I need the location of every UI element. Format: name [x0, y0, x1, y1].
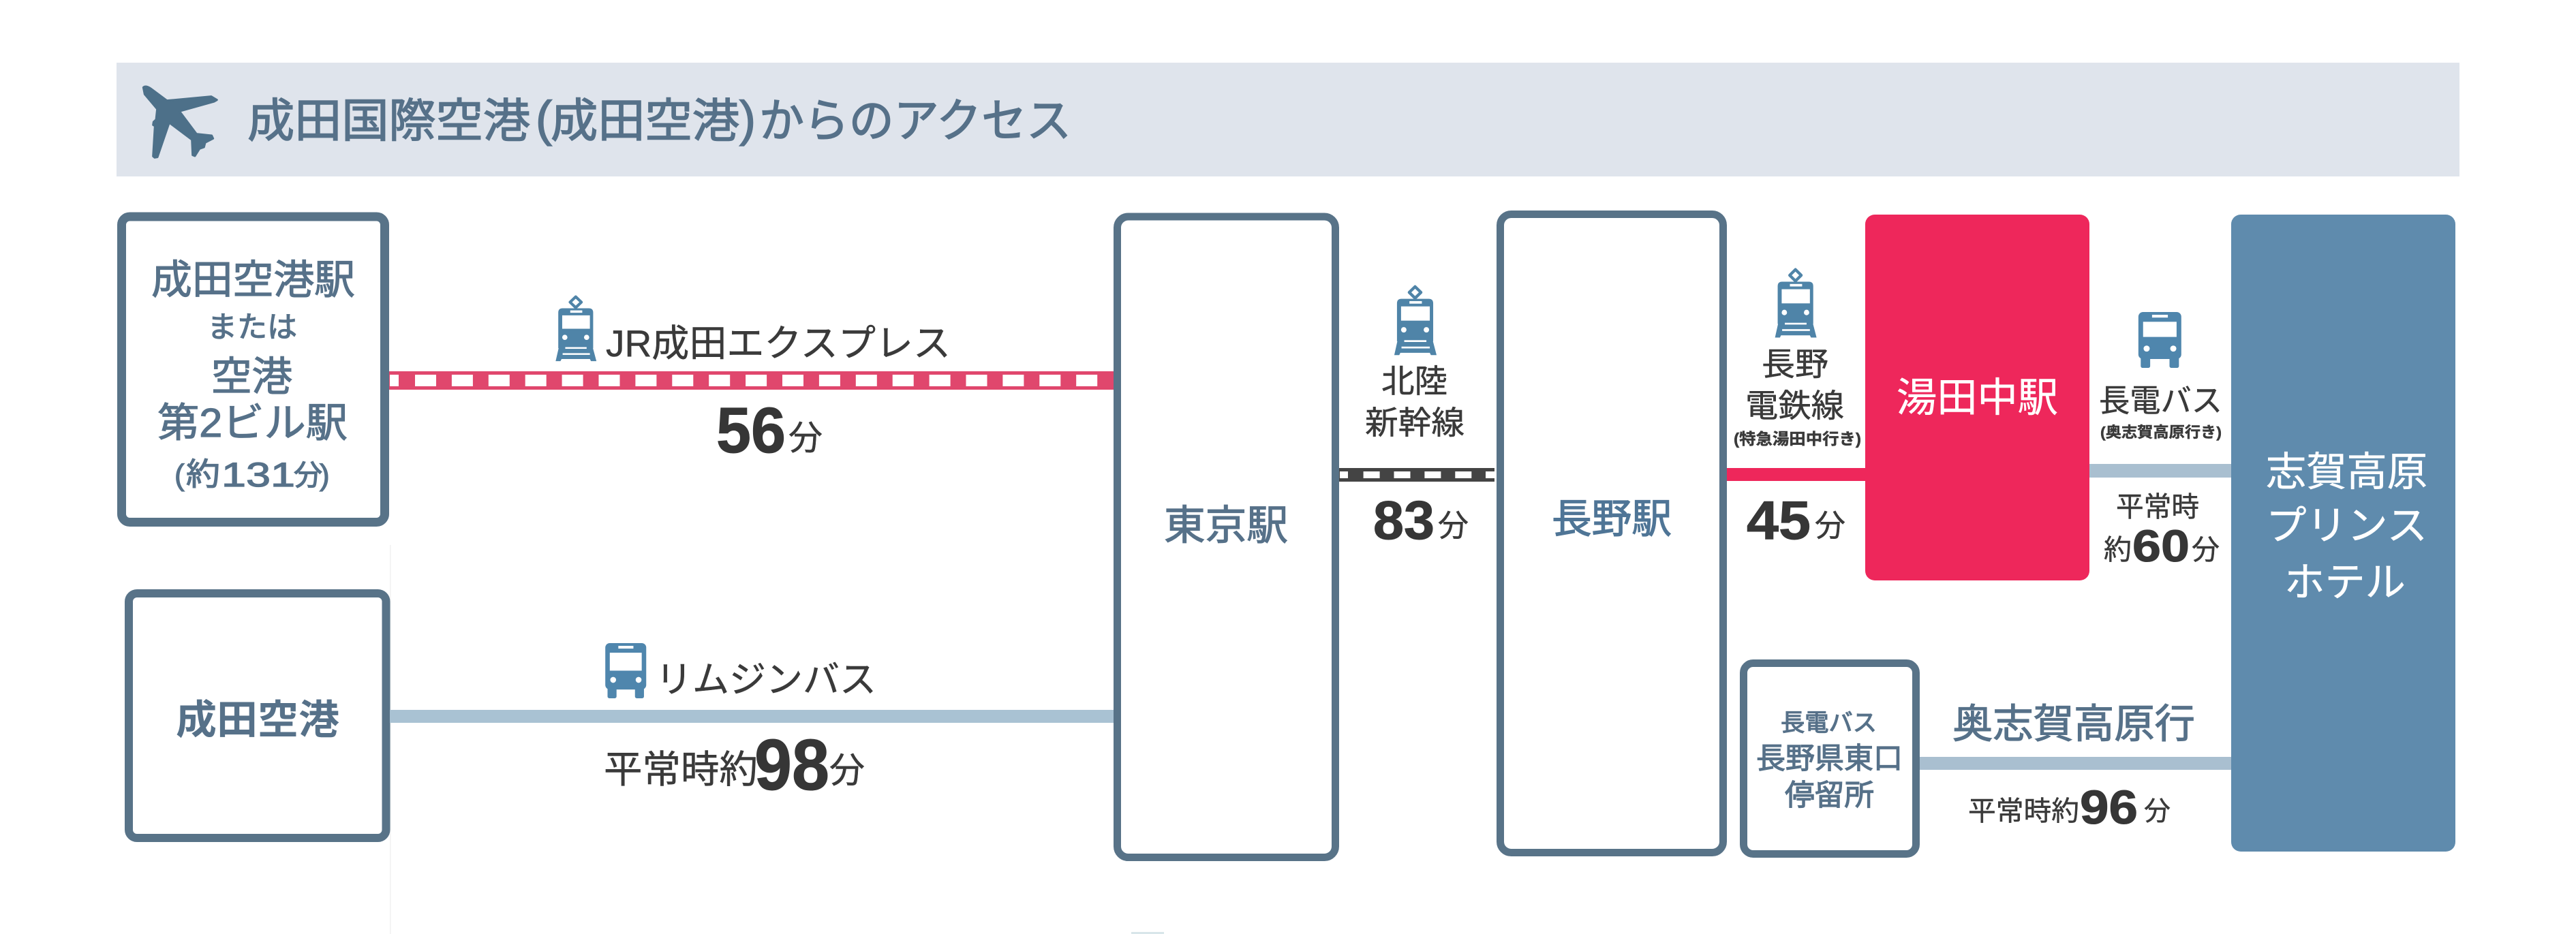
heading: ): [739, 92, 756, 146]
label: limousine bus: リムジンバス: [656, 659, 876, 700]
panel: Narita Airport station: 分: [294, 459, 322, 491]
panel: Narita Airport station: 第2ビル駅: [157, 401, 348, 446]
time: usually about 96 minutes: 分: [2144, 797, 2171, 826]
route line: Nagano Electric Railway: [1727, 468, 1865, 481]
panel: Narita Airport station: ): [320, 458, 330, 492]
panel: Narita Airport station: 約: [186, 456, 220, 492]
icon: bus: [2138, 312, 2181, 368]
time: usually about 98 minutes: 分: [829, 751, 865, 791]
time: usually about 96 minutes: 平常時約: [1968, 796, 2079, 826]
panel: Yudanaka Station: [1865, 215, 2089, 580]
icon: train: [555, 297, 596, 361]
panel: Tokyo Station: [1118, 217, 1336, 857]
panel: Nagaden Bus Nagano Station East Exit stop: 長野県東口: [1756, 743, 1903, 775]
panel: Shiga Kogen Prince Hotel: 志賀高原: [2266, 450, 2427, 495]
panel: Nagaden Bus Nagano Station East Exit stop: 停留所: [1785, 779, 1874, 812]
route line: limousine bus: [390, 710, 1114, 723]
label: Nagano Electric Railway: 長野: [1762, 346, 1828, 382]
label: Hokuriku Shinkansen: [1365, 363, 1465, 441]
icon: train: [1775, 270, 1817, 338]
label: bound for Oku-Shiga Kogen: 奥志賀高原行: [1952, 702, 2195, 747]
time: 45 minutes: 45: [1747, 490, 1811, 550]
heading: 成田国際空港: [247, 95, 530, 147]
time: 45 minutes: 分: [1815, 508, 1845, 543]
time: 56 minutes: 分: [788, 419, 823, 457]
label: Nagano Electric Railway: 電鉄線: [1745, 388, 1844, 424]
panel: Nagano Station: 長野駅: [1552, 497, 1672, 542]
heading: (: [536, 92, 552, 146]
time: usually about 60 minutes: 分: [2192, 534, 2220, 565]
panel: Nagaden Bus Nagano Station East Exit stop: [1743, 664, 1916, 854]
route line: Hokuriku Shinkansen: [1339, 468, 1494, 482]
time: usually about 98 minutes: [604, 725, 865, 805]
time: usually about 98 minutes: 98: [754, 725, 829, 805]
panel: Narita Airport: 成田空港: [176, 698, 339, 743]
panel: Narita Airport station: 成田空港駅: [151, 258, 355, 302]
time: usually about 60 minutes: [2104, 491, 2220, 571]
time: 83 minutes: [1373, 490, 1469, 550]
icon: airplane: [143, 87, 217, 157]
label: Nagano Electric Railway: (特急湯田中行き): [1734, 430, 1861, 448]
time: usually about 60 minutes: 平常時: [2116, 491, 2199, 523]
time: usually about 96 minutes: [1968, 781, 2171, 834]
panel: Shiga Kogen Prince Hotel: プリンス: [2266, 503, 2427, 548]
title band: [117, 63, 2459, 176]
label: Nagaden Bus: 長電バス: [2099, 383, 2222, 418]
label: Nagaden Bus: (奥志賀高原行き): [2100, 424, 2222, 441]
panel: Shiga Kogen Prince Hotel: [2231, 215, 2455, 852]
panel: Narita Airport station: 空港: [211, 354, 292, 399]
time: 56 minutes: [716, 394, 823, 467]
time: usually about 98 minutes: 平常時約: [604, 748, 758, 791]
panel: Tokyo Station: 東京駅: [1164, 503, 1288, 548]
time: 45 minutes: [1747, 490, 1845, 550]
heading: からのアクセス: [759, 95, 1071, 147]
heading: 成田空港: [551, 95, 739, 147]
label: JR Narita Express: JR成田エクスプレス: [606, 322, 951, 364]
label: Nagano Electric Railway: [1734, 346, 1861, 448]
route line: Nagaden Bus: [2089, 464, 2231, 478]
icon: train: [1394, 287, 1437, 355]
label: Hokuriku Shinkansen: 北陸: [1381, 363, 1447, 399]
panel: Narita Airport station: [121, 217, 384, 522]
label: Nagaden Bus: [2099, 383, 2222, 441]
time: 83 minutes: 83: [1373, 490, 1435, 550]
panel: Nagano Station: [1501, 214, 1723, 853]
time: 56 minutes: 56: [716, 394, 786, 467]
time: usually about 96 minutes: 96: [2080, 781, 2138, 834]
panel: Narita Airport station: または: [207, 311, 297, 344]
heading: [247, 92, 1071, 147]
route line: Oku-Shiga Kogen bus: [1920, 757, 2231, 770]
panel: Narita Airport station: 131: [221, 456, 295, 494]
time: 83 minutes: 分: [1438, 508, 1469, 543]
time: usually about 60 minutes: 60: [2132, 520, 2190, 571]
panel: Shiga Kogen Prince Hotel: ホテル: [2284, 560, 2406, 605]
panel: Yudanaka Station: 湯田中駅: [1897, 375, 2058, 420]
panel: Narita Airport station: (: [174, 458, 185, 492]
time: usually about 60 minutes: 約: [2104, 534, 2132, 565]
panel: Narita Airport: [129, 593, 386, 838]
label: Hokuriku Shinkansen: 新幹線: [1365, 405, 1465, 441]
icon: bus: [605, 643, 646, 698]
route line: JR Narita Express: [389, 371, 1114, 390]
panel: Nagaden Bus Nagano Station East Exit stop: 長電バス: [1781, 710, 1877, 736]
